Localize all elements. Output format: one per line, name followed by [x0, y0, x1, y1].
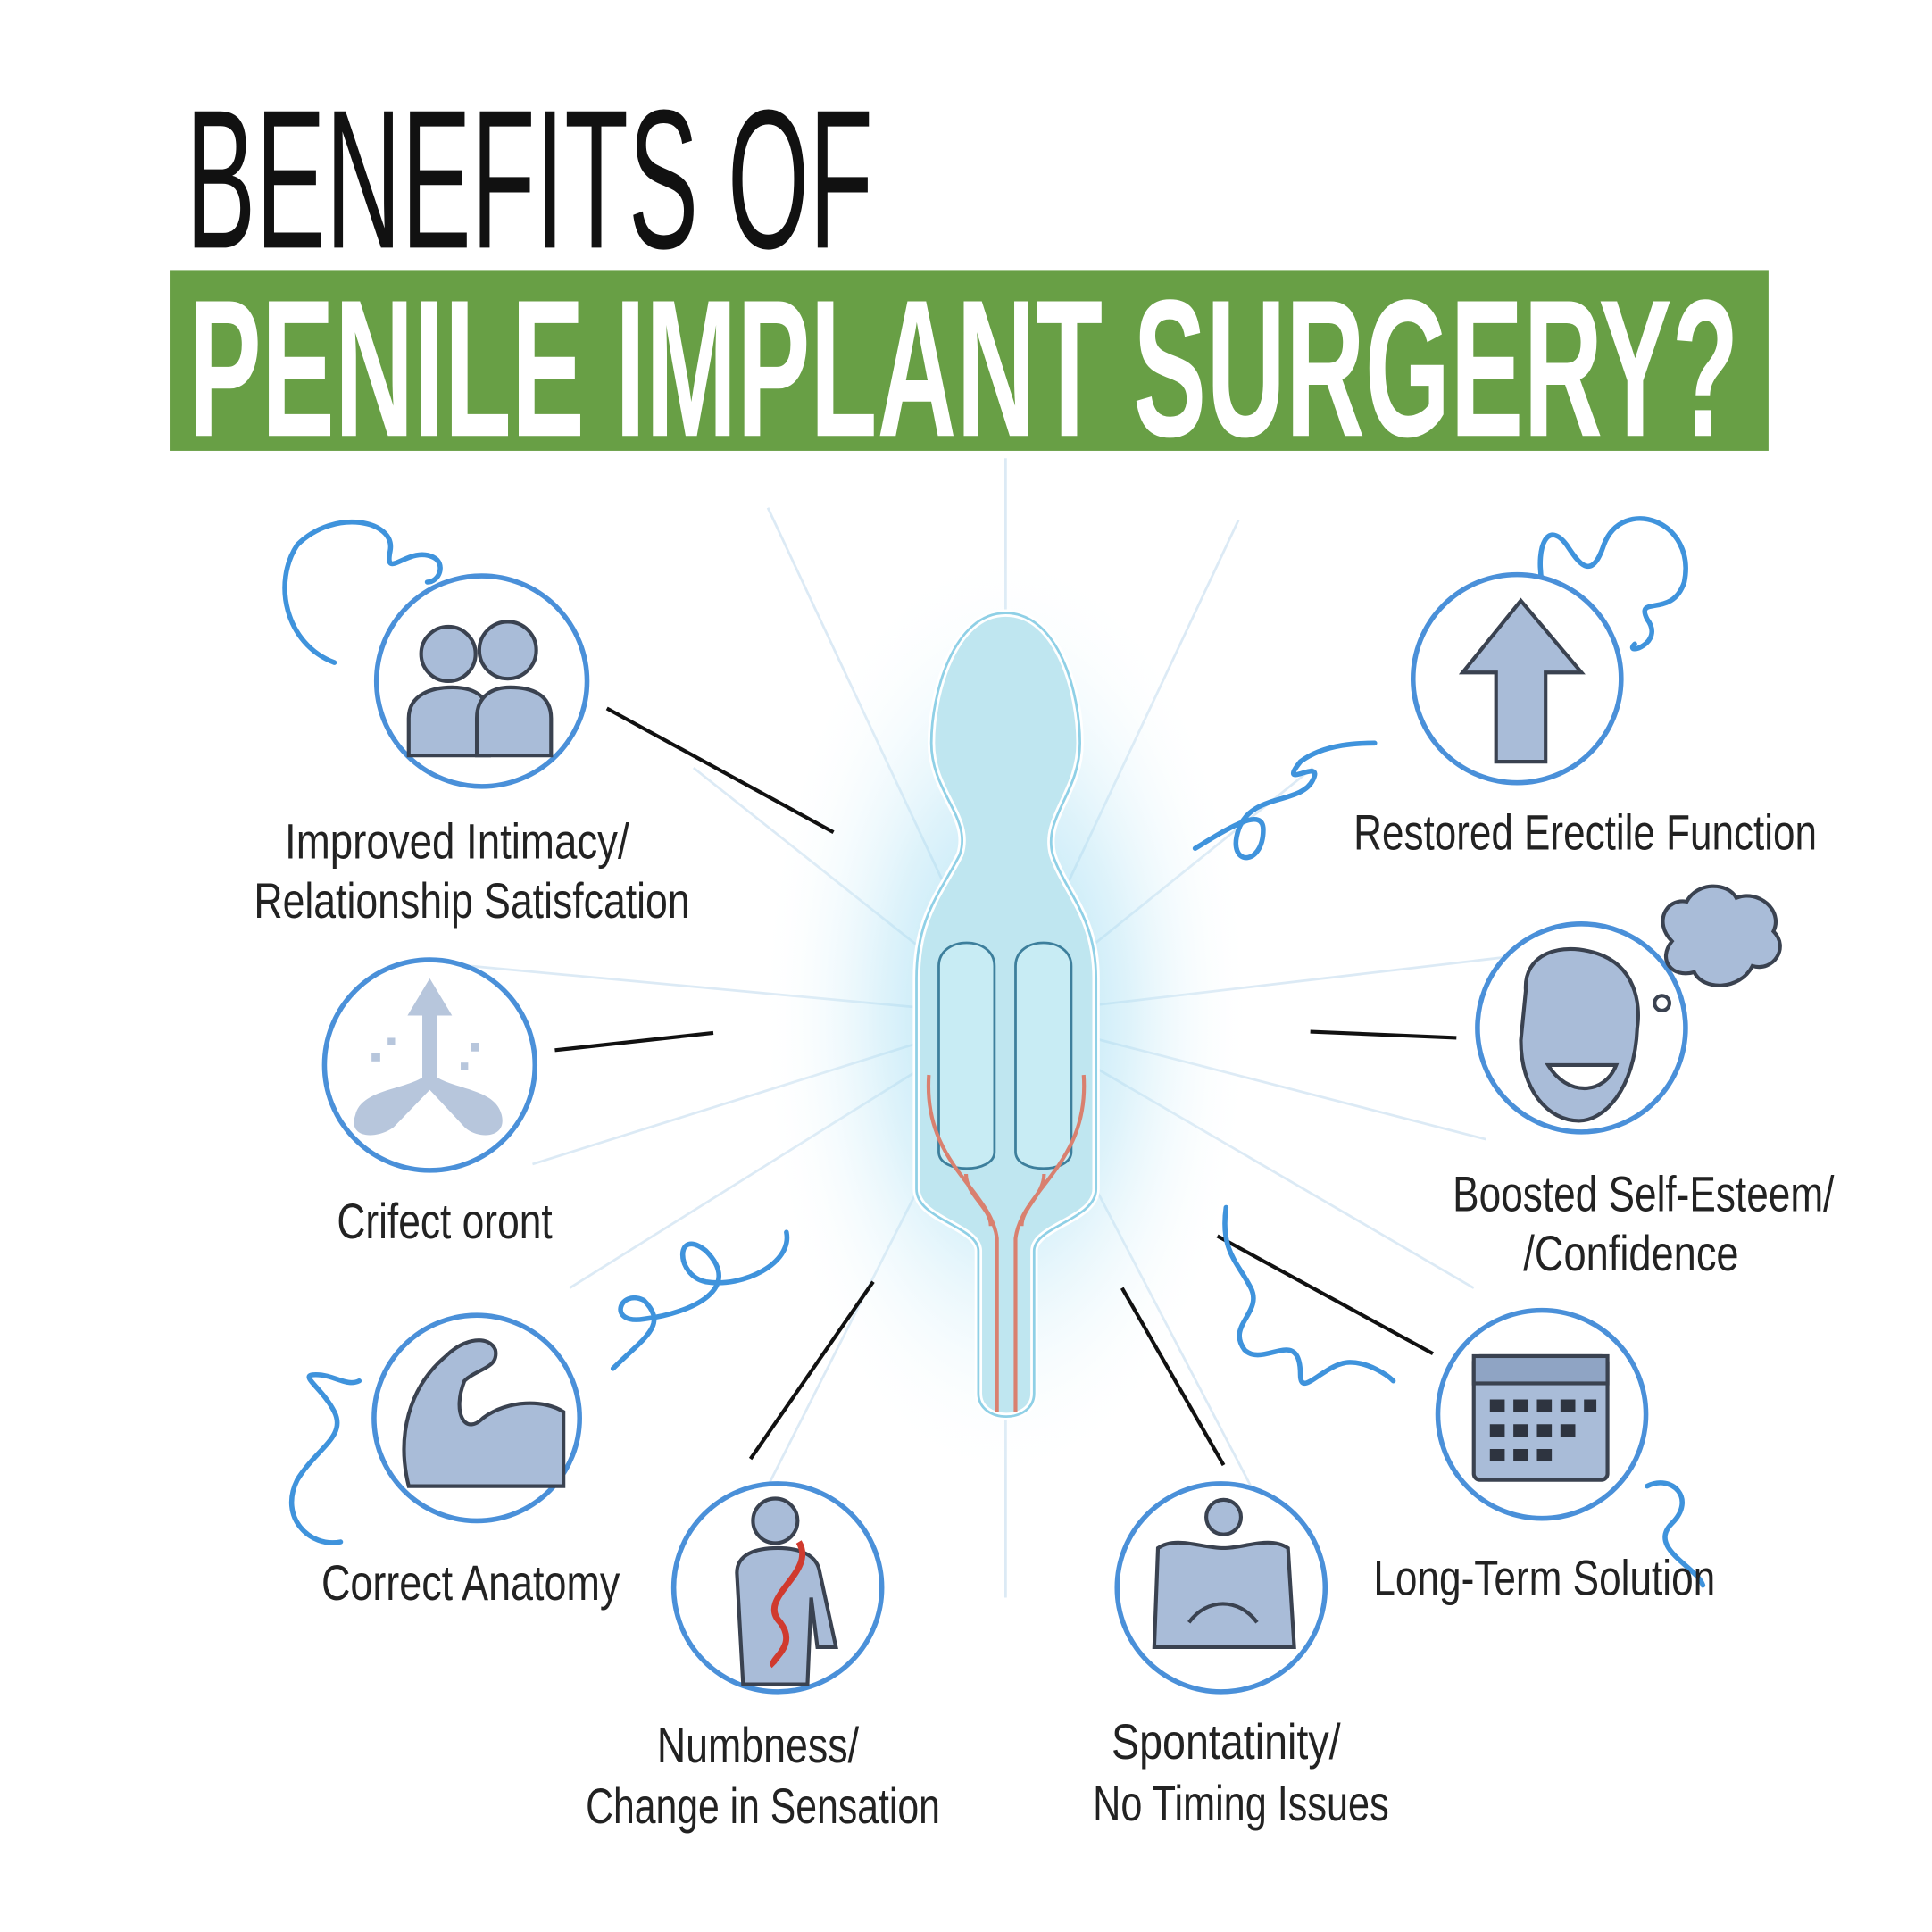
icon: split arrow: [354, 978, 503, 1135]
panel: crifect oront: Crifect oront: [337, 1194, 553, 1249]
connector lines: [554, 708, 1456, 1465]
panel: correct anatomy: [321, 1315, 620, 1611]
panel: boosted self-esteem: Boosted Self-Esteem/: [1453, 1167, 1835, 1222]
title: [170, 69, 1769, 478]
panel: improved intimacy: Relationship Satisfcation: [254, 873, 690, 929]
panel: boosted self-esteem: [1453, 887, 1835, 1281]
icon: calendar: [1474, 1356, 1608, 1480]
panel: spontaneity: No Timing Issues: [1093, 1776, 1389, 1831]
panel: correct anatomy: Correct Anatomy: [321, 1555, 620, 1611]
icon: couple: [409, 621, 551, 755]
icon: person embrace: [1154, 1500, 1295, 1647]
panel: spontaneity: [1093, 1484, 1389, 1831]
panel: crifect oront: [324, 960, 553, 1249]
background rays: [471, 458, 1536, 1597]
implant illustration: [758, 545, 1253, 1486]
panel: long-term solution: [1373, 1311, 1715, 1606]
icon: up arrow: [1462, 601, 1581, 762]
icon: person with red nerve: [737, 1498, 836, 1685]
panel: boosted self-esteem: /Confidence: [1523, 1226, 1739, 1281]
title: BENEFITS OF: [186, 69, 873, 290]
tubing: [929, 1075, 1084, 1412]
panel: numbness: Change in Sensation: [586, 1778, 940, 1834]
icon: flexed arm: [404, 1340, 563, 1486]
icon: thought cloud: [1654, 887, 1780, 1011]
panel: spontaneity: Spontatinity/: [1112, 1714, 1341, 1770]
panel: numbness: [586, 1484, 940, 1834]
panel: improved intimacy: Improved Intimacy/: [285, 813, 629, 869]
cylinders: [938, 943, 1071, 1169]
squiggles: [285, 519, 1703, 1586]
panel: improved intimacy: [254, 576, 690, 929]
panel: restored erectile function: [1353, 575, 1817, 861]
panel: long-term solution: Long-Term Solution: [1373, 1551, 1715, 1606]
icon: smiling face: [1520, 949, 1638, 1120]
panel: restored erectile function: Restored Erectile Function: [1353, 805, 1817, 861]
panel: numbness: Numbness/: [657, 1718, 859, 1773]
